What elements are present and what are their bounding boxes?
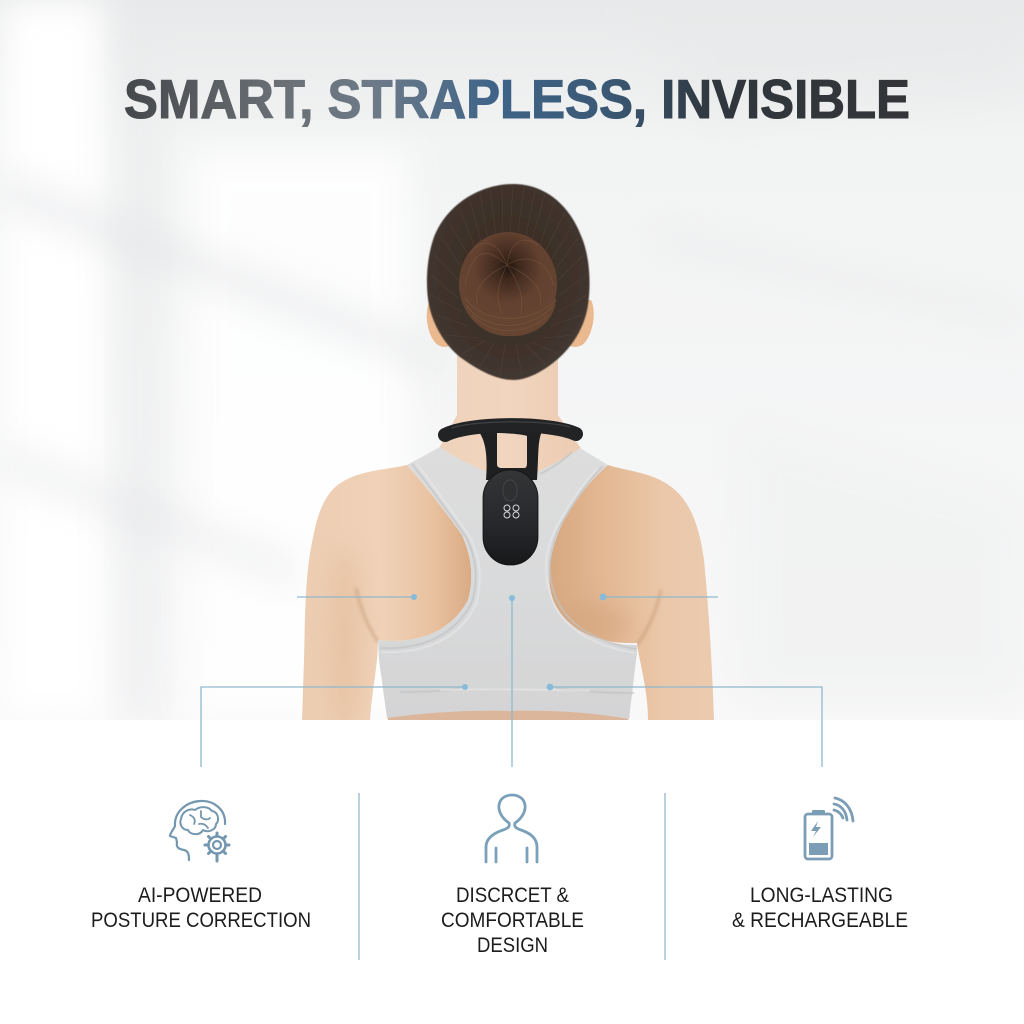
sensor pod	[483, 470, 538, 565]
feature 2: discreet design	[441, 795, 584, 957]
neck	[440, 354, 582, 472]
racerback highlight stitching	[381, 464, 635, 691]
label: rechargeable: & RECHARGEABLE	[732, 909, 908, 932]
label: long-lasting: LONG-LASTING	[750, 884, 893, 907]
icon: person outline	[486, 795, 537, 862]
bun wrap	[482, 298, 556, 336]
collar highlight	[452, 422, 570, 428]
woman seen from behind wearing the device	[295, 184, 720, 730]
label: posture correction: POSTURE CORRECTION	[91, 909, 311, 932]
lower back skin below the band	[388, 710, 630, 720]
icon: battery with wireless waves	[805, 798, 853, 859]
callout dots	[411, 594, 606, 690]
racerback top	[378, 447, 638, 719]
right ear	[570, 300, 594, 347]
feature 3: long-lasting battery	[732, 798, 908, 932]
feature 1: AI posture correction	[91, 801, 311, 932]
hair bun	[459, 232, 557, 336]
left shoulder and arm	[302, 465, 472, 720]
bun strands	[465, 240, 556, 331]
photo background: wall with window light	[0, 0, 1024, 720]
hair strands	[431, 186, 587, 376]
title: SMART, STRAPLESS, INVISIBLE	[124, 68, 910, 130]
collar strap with window	[480, 432, 542, 480]
left ear	[427, 300, 449, 347]
icon: head with brain and gear	[170, 801, 229, 861]
label: design: DESIGN	[477, 934, 548, 957]
neck collar	[445, 425, 576, 435]
right shoulder and arm	[545, 460, 720, 720]
label: discrcet and: DISCRCET &	[456, 884, 569, 907]
racerback edge stitching	[380, 452, 636, 693]
column dividers	[359, 793, 665, 960]
label: AI-powered: AI-POWERED	[138, 884, 262, 907]
pod logo	[504, 505, 519, 518]
callout connector lines	[201, 597, 822, 767]
pod button	[503, 480, 517, 501]
hair	[427, 184, 590, 380]
white lower panel	[0, 720, 1024, 1024]
label: comfortable: COMFORTABLE	[441, 909, 584, 932]
